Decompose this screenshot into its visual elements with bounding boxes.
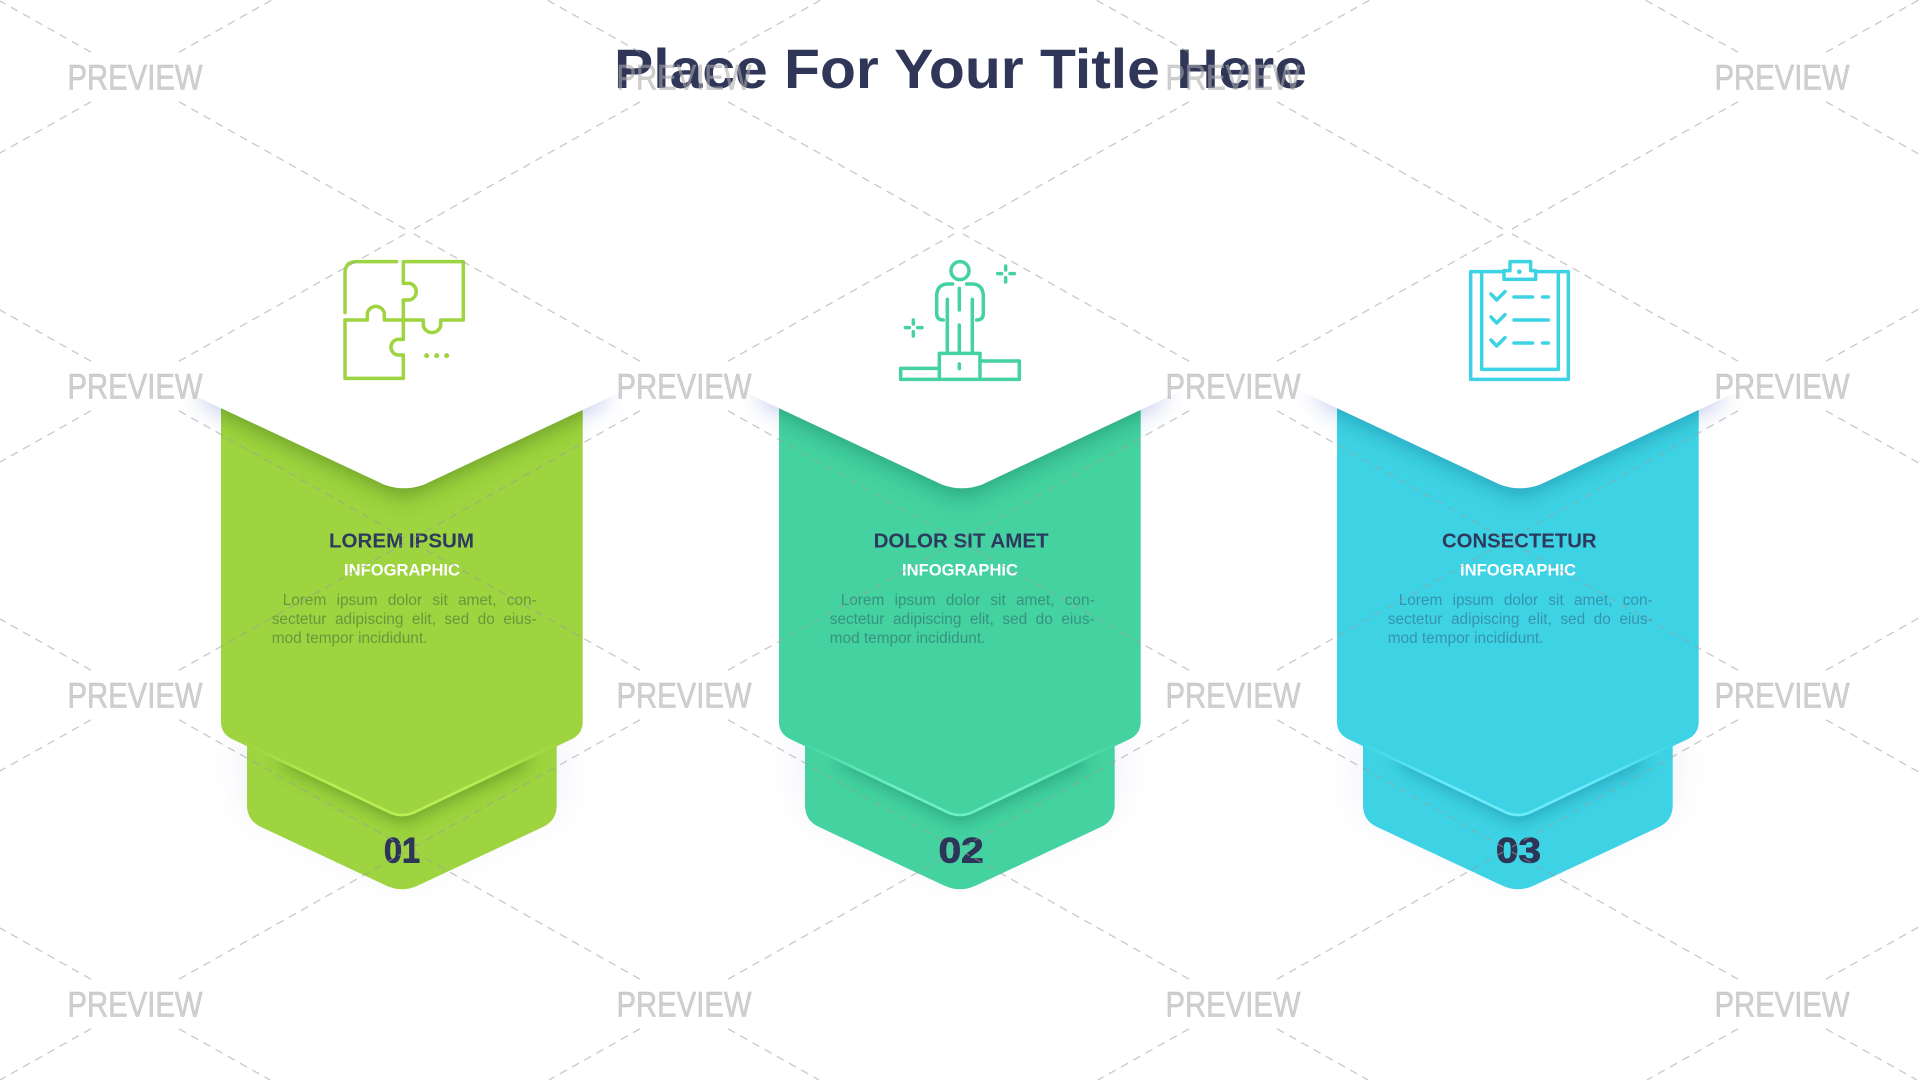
white cap xyxy=(688,200,1238,488)
white cap xyxy=(130,200,680,488)
title: Place For Your Title Here xyxy=(614,37,1307,100)
front panel xyxy=(1337,400,1699,816)
heading: CONSECTETUR xyxy=(1442,530,1597,553)
subheading: INFOGRAPHIC xyxy=(1460,562,1576,580)
heading: LOREM IPSUM xyxy=(329,530,474,553)
icon: person on podium xyxy=(901,262,1019,379)
watermark lattice overlay: PREVIEW xyxy=(1714,986,1850,1024)
watermark lattice overlay: PREVIEW xyxy=(68,676,202,716)
watermark lattice overlay: PREVIEW xyxy=(1166,58,1300,98)
icon: puzzle xyxy=(345,262,463,378)
heading: DOLOR SIT AMET xyxy=(874,530,1049,553)
body text xyxy=(1388,592,1653,647)
back tab xyxy=(805,700,1115,889)
body text: Lorem ipsum dolor sit amet, con- xyxy=(841,592,1095,609)
cap shadow on panel xyxy=(1337,408,1699,504)
watermark lattice overlay: PREVIEW xyxy=(1714,676,1850,716)
subheading: INFOGRAPHIC xyxy=(902,562,1018,580)
panel: step 02 dolor sit amet xyxy=(750,260,1173,890)
cap shadow outside xyxy=(1319,374,1720,496)
subheading: INFOGRAPHIC xyxy=(344,562,460,580)
watermark lattice overlay: PREVIEW xyxy=(1166,986,1300,1024)
watermark lattice overlay: PREVIEW xyxy=(1714,368,1850,406)
icon: clipboard checklist xyxy=(1471,262,1568,379)
body text xyxy=(830,592,1095,647)
body text: mod tempor incididunt. xyxy=(272,630,427,647)
watermark lattice overlay: PREVIEW xyxy=(616,986,752,1024)
panel highlight edge xyxy=(1356,741,1680,815)
tab shadow xyxy=(843,745,1083,822)
panel: step 01 lorem ipsum xyxy=(193,260,615,890)
cap shadow on panel xyxy=(779,408,1141,504)
body text: mod tempor incididunt. xyxy=(1388,630,1543,647)
watermark lattice overlay: PREVIEW xyxy=(1166,368,1300,406)
watermark lattice overlay: PREVIEW xyxy=(1714,58,1850,98)
front panel xyxy=(779,400,1141,816)
number: 03 xyxy=(1496,832,1541,871)
cap shadow on panel xyxy=(221,408,583,506)
soft ground shadow xyxy=(240,720,564,885)
number: 02 xyxy=(939,832,984,871)
panel highlight edge xyxy=(240,741,564,815)
body text: sectetur adipiscing elit, sed do eius- xyxy=(830,611,1095,628)
white cap xyxy=(1246,200,1796,488)
back tab xyxy=(1363,700,1673,889)
body text: mod tempor incididunt. xyxy=(830,630,985,647)
front panel xyxy=(221,400,583,816)
watermark lattice overlay: PREVIEW xyxy=(68,58,202,98)
body text: Lorem ipsum dolor sit amet, con- xyxy=(283,592,537,609)
watermark lattice overlay: PREVIEW xyxy=(616,368,752,406)
watermark lattice overlay: PREVIEW xyxy=(68,986,202,1024)
tab shadow xyxy=(285,745,525,822)
watermark lattice overlay: PREVIEW xyxy=(1166,676,1300,716)
watermark lattice overlay: PREVIEW xyxy=(68,368,202,406)
watermark lattice overlay: PREVIEW xyxy=(616,58,752,98)
panel: step 03 consectetur xyxy=(1308,260,1731,890)
body text: sectetur adipiscing elit, sed do eius- xyxy=(272,611,537,628)
soft ground shadow xyxy=(1356,720,1680,885)
cap shadow outside xyxy=(761,374,1162,496)
body text: sectetur adipiscing elit, sed do eius- xyxy=(1388,611,1653,628)
back tab xyxy=(247,700,557,889)
soft ground shadow xyxy=(798,720,1122,885)
number: 01 xyxy=(384,832,420,871)
body text xyxy=(272,592,537,647)
tab shadow xyxy=(1401,745,1641,822)
body text: Lorem ipsum dolor sit amet, con- xyxy=(1399,592,1653,609)
panel highlight edge xyxy=(798,741,1122,815)
watermark lattice overlay: PREVIEW xyxy=(616,676,752,716)
cap shadow outside xyxy=(203,374,604,496)
